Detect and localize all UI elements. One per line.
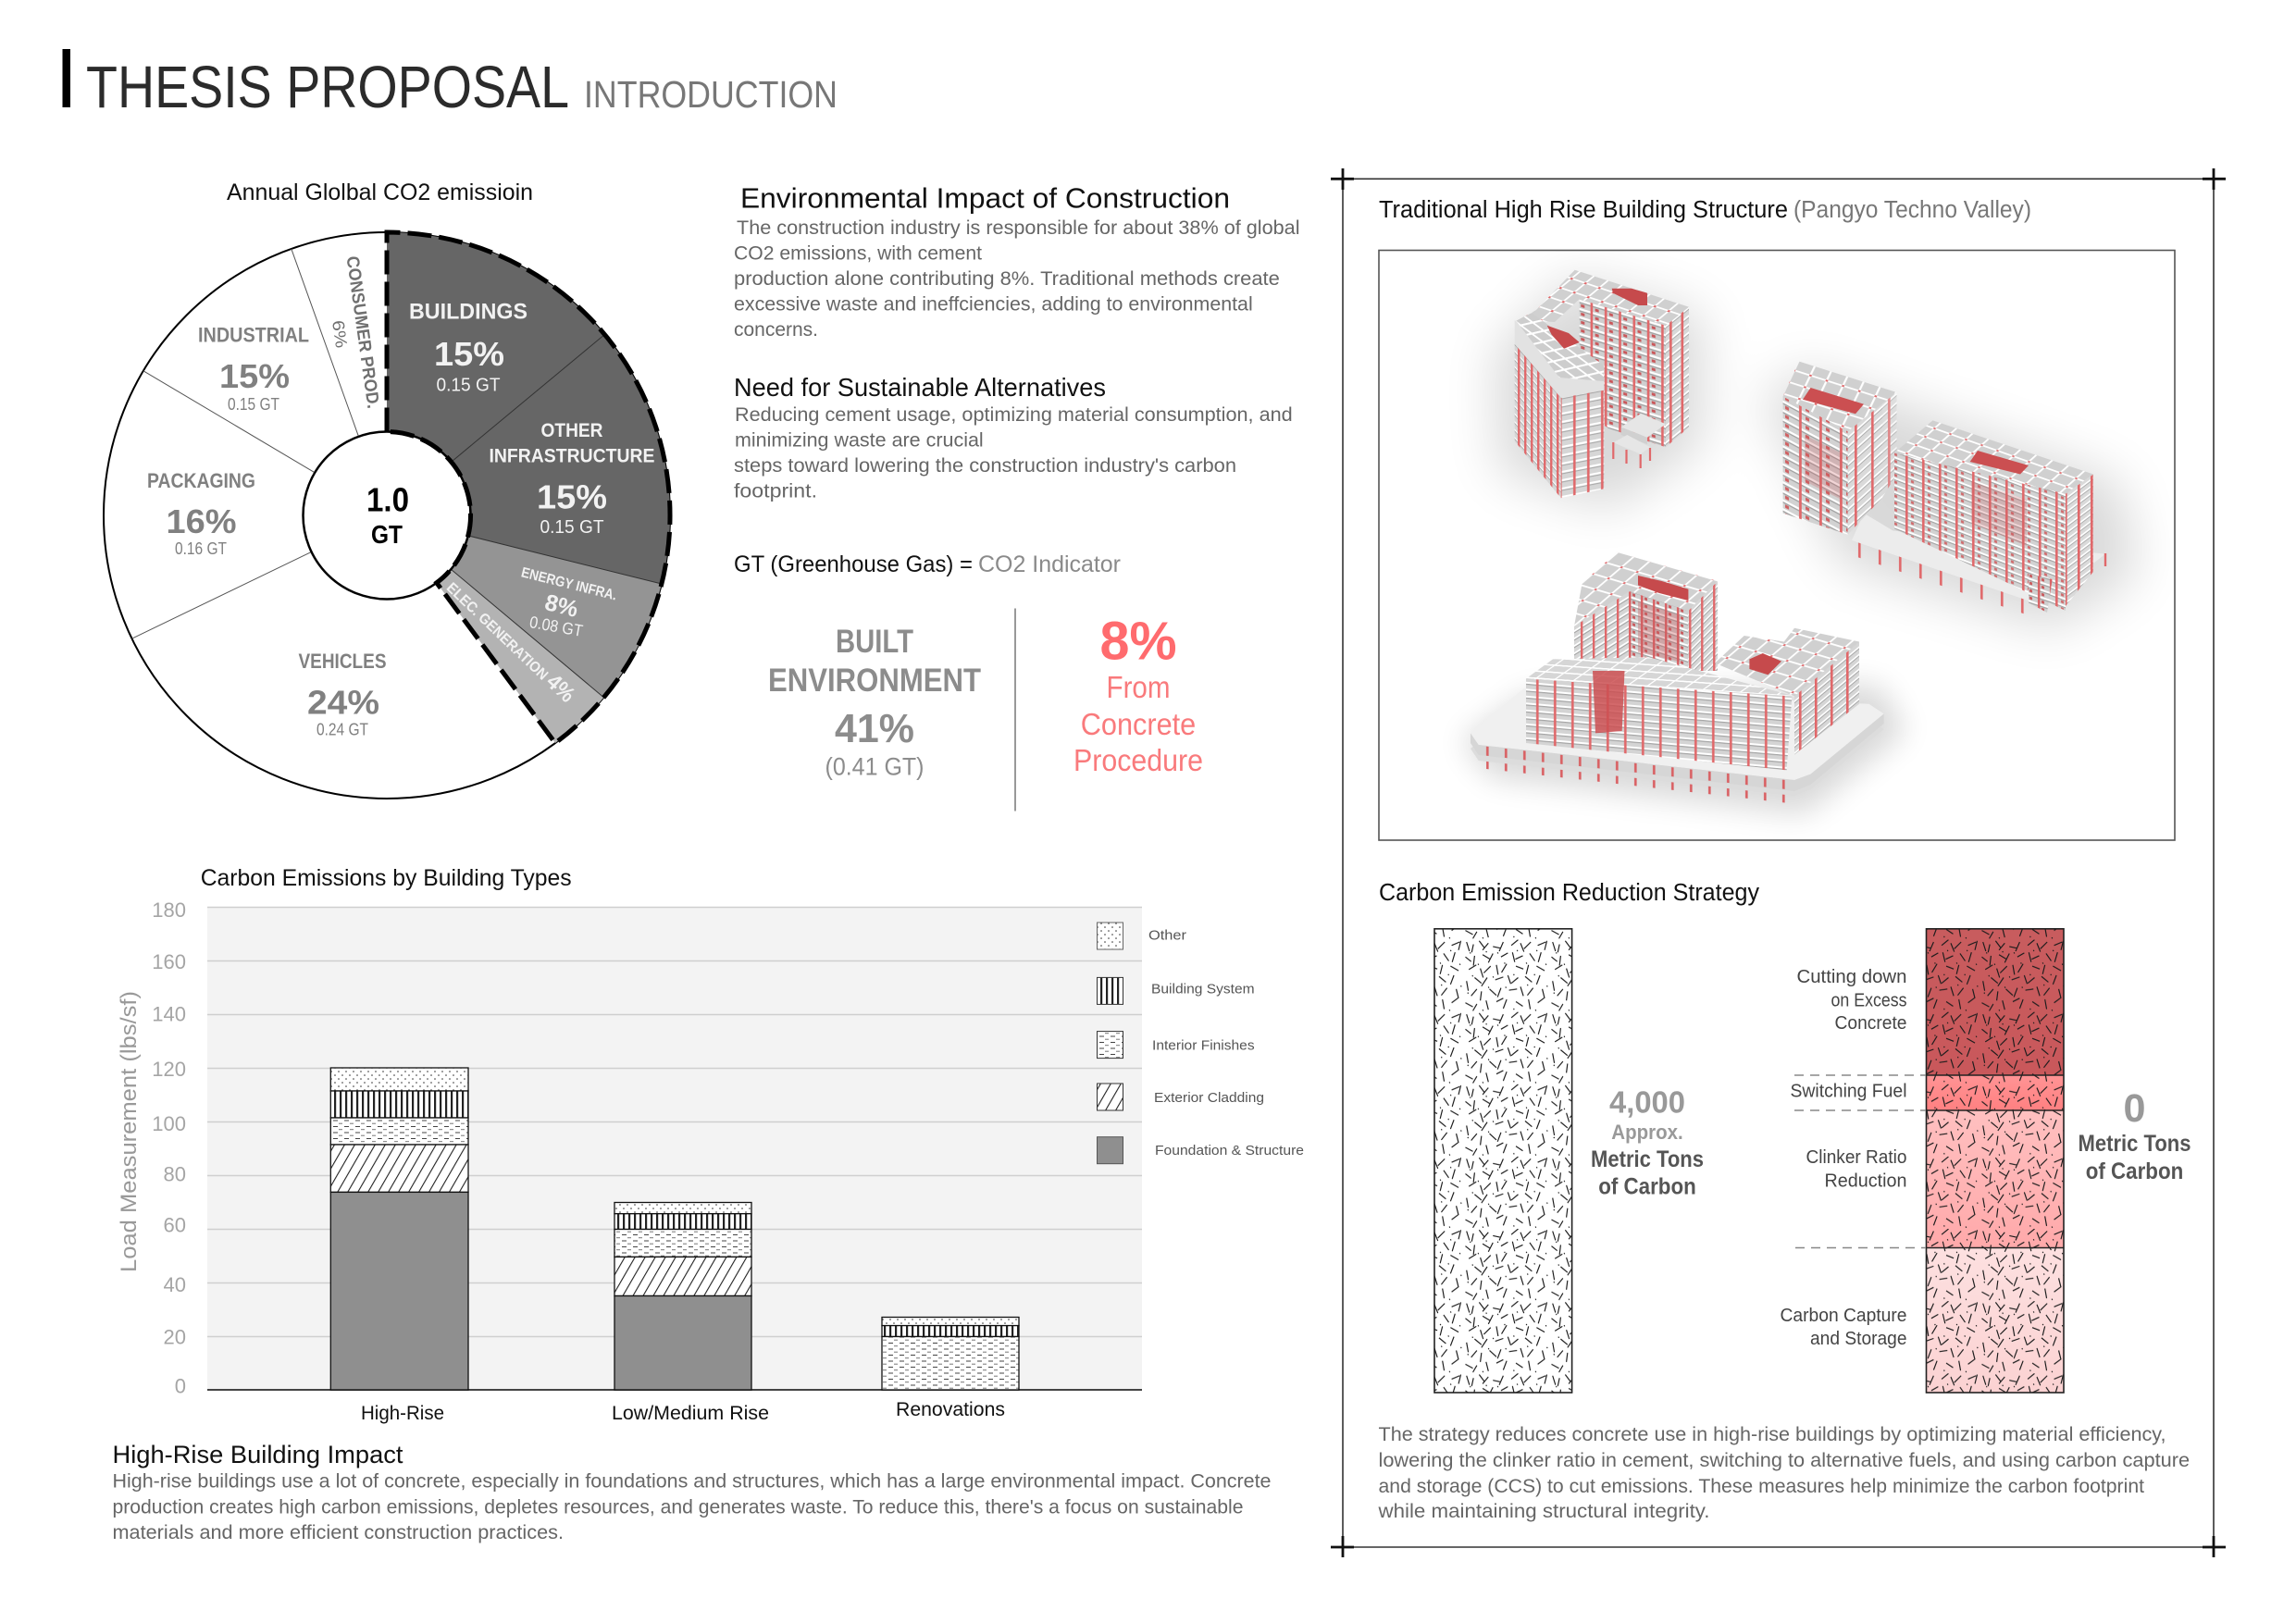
text block: high-rise building impact: production creates high carbon emissions, depletes resources, and generates waste. To reduce this, there's a focus on sustainable (113, 1497, 1244, 1518)
y axis labels: 120 (152, 1058, 186, 1081)
legend: Other (1148, 929, 1186, 944)
title: THESIS PROPOSAL (86, 54, 569, 120)
stat: built environment 41% (768, 624, 981, 781)
building group B (1783, 361, 2105, 615)
building group A (1515, 270, 1689, 498)
callout: 4,000 metric tons: of Carbon (1598, 1173, 1696, 1199)
bar: renovations (882, 1318, 1019, 1390)
segment label: vehicles (298, 650, 387, 738)
segment label: buildings: 0.15 GT (437, 374, 501, 396)
text block: high-rise building impact (113, 1441, 1272, 1543)
text block: need for sustainable alternatives: footprint. (734, 481, 817, 502)
text block: strategy description: The strategy reduces concrete use in high-rise buildings by optimizing material efficiency, (1379, 1424, 2166, 1445)
shadows (1462, 278, 2138, 814)
x axis labels (361, 1399, 1005, 1424)
segment label: other infrastructure: 15% (537, 478, 607, 516)
segment label: buildings: 15% (434, 335, 504, 373)
segment label: industrial (198, 324, 309, 414)
strategy labels: on Excess (1831, 990, 1906, 1010)
segment label: packaging: PACKAGING (147, 469, 255, 492)
title: INTRODUCTION (584, 73, 838, 116)
text block: strategy description: lowering the clinker ratio in cement, switching to alternative fuels, and using carbon capture (1379, 1450, 2190, 1471)
segment label: buildings: BUILDINGS (409, 300, 527, 324)
center total: 1.0 (366, 481, 409, 518)
legend: Interior Finishes (1152, 1038, 1255, 1053)
y axis labels: 180 (152, 898, 186, 922)
stat: built environment 41%: BUILT (836, 624, 913, 660)
column: reduction strategies (1794, 929, 2064, 1393)
strategy labels: Concrete (1834, 1013, 1906, 1034)
callout: 0 metric tons (2079, 1086, 2191, 1184)
text block: need for sustainable alternatives: minimizing waste are crucial (735, 429, 984, 452)
text block: environmental impact (734, 181, 1299, 341)
callout: 0 metric tons: Metric Tons (2079, 1131, 2191, 1157)
heading: annual global CO2 emission: Annual Glolbal CO2 emissioin (227, 180, 533, 205)
segment label: other infrastructure: 0.15 GT (540, 516, 604, 538)
stat: 8% from concrete procedure: Concrete (1081, 707, 1196, 741)
center total (366, 481, 409, 549)
legend: Exterior Cladding (1154, 1091, 1264, 1106)
text block: environmental impact: excessive waste and ineffciencies, adding to environmental (734, 294, 1253, 315)
stat: built environment 41%: 41% (835, 706, 914, 751)
stat: 8% from concrete procedure: Procedure (1074, 743, 1203, 777)
GT definition (734, 551, 1121, 577)
segment label: industrial: 0.15 GT (228, 395, 279, 414)
strategy labels: Clinker Ratio (1806, 1147, 1906, 1168)
y axis labels: 160 (152, 950, 186, 973)
text block: need for sustainable alternatives (734, 373, 1293, 502)
text block: environmental impact: concerns. (734, 319, 818, 341)
heading: traditional high rise building structure: Traditional High Rise Building Structure (1379, 197, 1788, 223)
segment label: other infrastructure (489, 420, 655, 538)
segment label: energy infrastructure: 8% (542, 589, 581, 623)
legend (1098, 923, 1304, 1164)
segment label: packaging: 16% (167, 502, 237, 540)
y axis labels: 140 (152, 1003, 186, 1025)
y axis labels: 80 (164, 1162, 186, 1186)
segment label: buildings (409, 300, 527, 396)
segment label: industrial: 15% (219, 357, 290, 395)
center total: GT (371, 520, 403, 549)
segment label: vehicles: 0.24 GT (316, 720, 368, 738)
column: baseline concrete (1434, 929, 1572, 1393)
stat: 8% from concrete procedure: 8% (1099, 612, 1177, 672)
GT definition: CO2 Indicator (978, 551, 1121, 577)
y axis labels: 100 (152, 1112, 186, 1135)
stat: built environment 41%: (0.41 GT) (825, 753, 924, 781)
y axis labels: 60 (164, 1214, 186, 1237)
legend: Building System (1151, 983, 1255, 997)
text block: high-rise building impact: materials and more efficient construction practices. (113, 1522, 564, 1543)
heading: traditional high rise building structure (1379, 197, 2031, 223)
y axis title: Load Measurement (lbs/sf) (117, 991, 142, 1272)
stat: 8% from concrete procedure (1074, 612, 1203, 777)
segment label: energy infrastructure: ENERGY INFRA. (519, 564, 618, 604)
x axis labels: Renovations (896, 1399, 1005, 1420)
strategy labels: Cutting down (1797, 967, 1906, 987)
y axis labels: 40 (164, 1273, 186, 1296)
strategy labels (1781, 967, 1906, 1349)
x axis labels: High-Rise (361, 1403, 444, 1424)
stat: built environment 41%: ENVIRONMENT (768, 663, 981, 699)
text block: high-rise building impact: High-rise buildings use a lot of concrete, especially in foundations and structures, which has a large environmental impact. Concrete (113, 1471, 1272, 1492)
illustration frame (1379, 250, 2175, 840)
callout: 4,000 metric tons: Metric Tons (1591, 1146, 1704, 1172)
callout: 0 metric tons: 0 (2123, 1086, 2145, 1131)
strategy labels: Carbon Capture (1781, 1306, 1906, 1326)
bar: high-rise (330, 1068, 468, 1390)
text block: strategy description: and storage (CCS) to cut emissions. These measures help minimize the carbon footprint (1379, 1476, 2144, 1497)
callout: 0 metric tons: of Carbon (2086, 1158, 2183, 1184)
heading: carbon emission reduction strategy: Carbon Emission Reduction Strategy (1379, 880, 1759, 906)
donut chart: CO2 emissions by sector (104, 232, 670, 799)
segment label: industrial: INDUSTRIAL (198, 324, 309, 347)
text block: high-rise building impact: High-Rise Building Impact (113, 1441, 403, 1468)
legend: Foundation & Structure (1155, 1144, 1304, 1158)
text block: strategy description (1377, 1424, 2190, 1522)
strategy labels: and Storage (1810, 1329, 1906, 1349)
text block: environmental impact: production alone contributing 8%. Traditional methods create (734, 268, 1280, 290)
segment label: vehicles: VEHICLES (298, 650, 387, 673)
segment label: other infrastructure: OTHER (540, 420, 603, 441)
heading: traditional high rise building structure: (Pangyo Techno Valley) (1793, 197, 2031, 223)
callout: 4,000 metric tons: 4,000 (1609, 1084, 1685, 1120)
panel: right frame with crop marks (1331, 168, 2226, 1557)
segment label: energy infrastructure: 0.08 GT (528, 613, 584, 640)
callout: 4,000 metric tons: Approx. (1611, 1121, 1683, 1144)
text block: strategy description: while maintaining structural integrity. (1377, 1501, 1710, 1522)
text block: environmental impact: Environmental Impact of Construction (740, 181, 1230, 215)
illustration: isometric building structures (1460, 267, 2149, 823)
segment label: other infrastructure: INFRASTRUCTURE (489, 446, 655, 467)
segment label: energy infrastructure (519, 564, 618, 640)
stacked bar chart (117, 898, 1304, 1424)
segment label: packaging (147, 469, 255, 558)
segment label: packaging: 0.16 GT (175, 539, 227, 558)
callout: 4,000 metric tons (1591, 1084, 1704, 1199)
y axis labels (152, 898, 186, 1398)
x axis labels: Low/Medium Rise (612, 1403, 769, 1424)
strategy labels: Reduction (1825, 1171, 1906, 1192)
segment label: consumer products: CONSUMER PROD. (342, 255, 382, 410)
segment label: vehicles: 24% (307, 683, 379, 722)
building group C (1471, 552, 1884, 804)
text block: need for sustainable alternatives: steps toward lowering the construction industry's carbon (734, 455, 1236, 477)
y axis labels: 20 (164, 1325, 186, 1349)
text block: need for sustainable alternatives: Need for Sustainable Alternatives (734, 373, 1106, 402)
text block: environmental impact: The construction industry is responsible for about 38% of global (737, 217, 1299, 239)
segment label: consumer products: 6% (329, 319, 351, 349)
text block: environmental impact: CO2 emissions, with cement (734, 242, 982, 265)
segment label: electricity generation: ELEC. GENERATION 4% (442, 575, 580, 708)
title (63, 49, 838, 120)
stat: 8% from concrete procedure: From (1107, 670, 1170, 704)
bar: low/medium rise (614, 1203, 751, 1390)
y axis labels: 0 (175, 1375, 186, 1398)
GT definition: GT (Greenhouse Gas) = (734, 551, 973, 577)
text block: need for sustainable alternatives: Reducing cement usage, optimizing material consumption, and (735, 404, 1293, 426)
heading: carbon emissions by building types: Carbon Emissions by Building Types (201, 865, 572, 891)
strategy labels: Switching Fuel (1790, 1082, 1906, 1102)
